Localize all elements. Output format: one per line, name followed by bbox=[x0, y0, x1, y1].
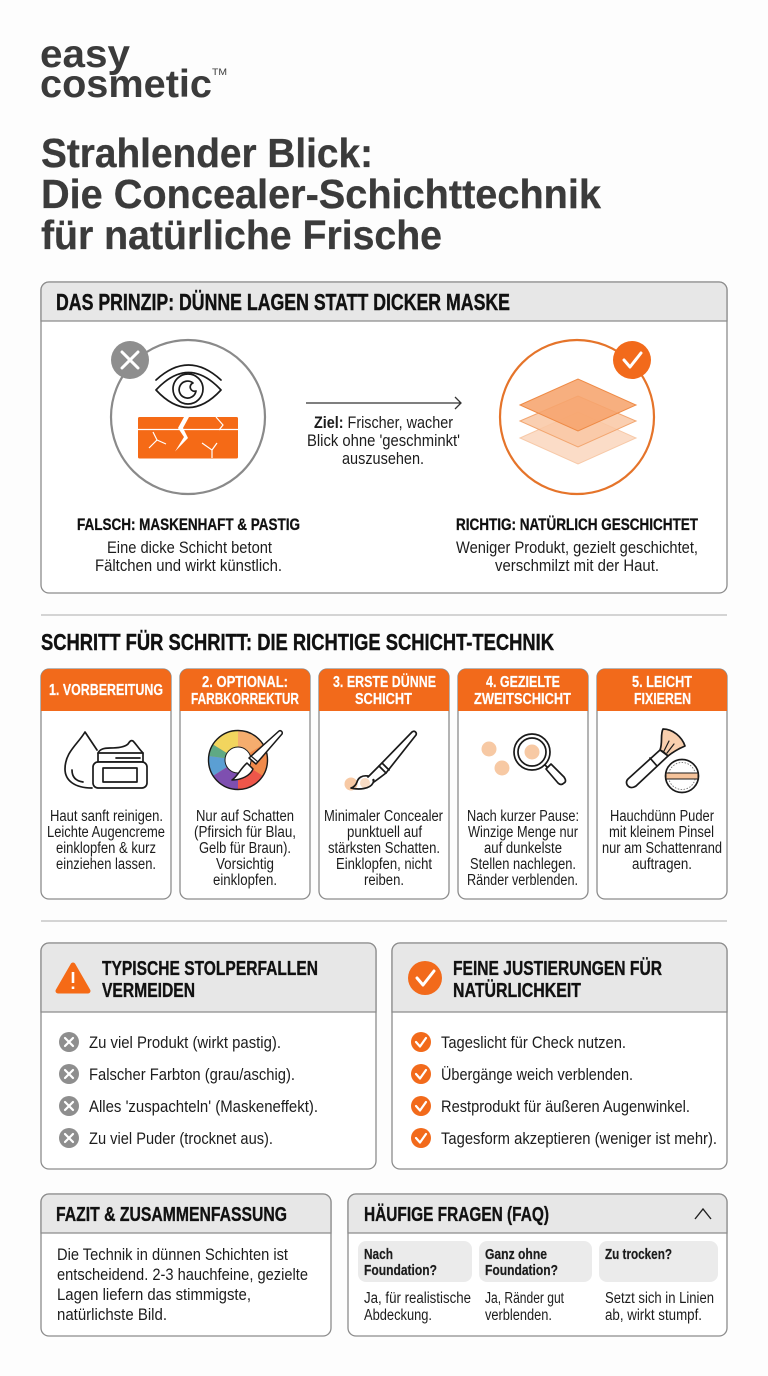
step card 1: 1. VORBEREITUNG bbox=[49, 682, 163, 699]
logo: cosmetic bbox=[40, 63, 212, 106]
text: step 4: Stellen nachlegen. bbox=[470, 856, 576, 873]
list: adjustments: Tageslicht für Check nutzen. bbox=[441, 1033, 626, 1052]
step card 4: 4. GEZIELTE bbox=[486, 674, 560, 691]
faq item 3: ab, wirkt stumpf. bbox=[605, 1307, 702, 1324]
text: step 5: nur am Schattenrand bbox=[602, 840, 722, 857]
step card 2: FARBKORREKTUR bbox=[191, 691, 299, 708]
text: step 3: Minimaler Concealer bbox=[324, 808, 443, 825]
title bbox=[41, 130, 601, 258]
text: falsch bbox=[77, 516, 300, 575]
faq item 2: verblenden. bbox=[485, 1307, 552, 1324]
icon: wrong, thick cracked layer bbox=[111, 340, 265, 494]
text: step 4: Ränder verblenden. bbox=[467, 872, 578, 889]
text: step 5: Hauchdünn Puder bbox=[610, 808, 714, 825]
text: step 2: Vorsichtig bbox=[216, 856, 274, 873]
text: step 2: einklopfen. bbox=[213, 872, 277, 889]
faq item 1: Ja, für realistische bbox=[364, 1290, 471, 1307]
list: pitfalls: Zu viel Puder (trocknet aus). bbox=[89, 1129, 273, 1148]
text: richtig: verschmilzt mit der Haut. bbox=[495, 556, 659, 575]
text: step 1 bbox=[47, 808, 165, 873]
step card 3: 3. ERSTE DÜNNE bbox=[333, 672, 436, 691]
heading: stolperfallen bbox=[102, 957, 318, 1002]
heading: faq: HÄUFIGE FRAGEN (FAQ) bbox=[364, 1203, 549, 1226]
icon: colour wheel and brush bbox=[208, 730, 282, 790]
panel: das prinzip bbox=[41, 282, 727, 593]
text: richtig: RICHTIG: NATÜRLICH GESCHICHTET bbox=[456, 515, 698, 534]
faq item 3: Zu trocken? bbox=[605, 1247, 672, 1263]
faq item 1: Foundation? bbox=[364, 1263, 437, 1279]
faq item 2: Foundation? bbox=[485, 1263, 558, 1279]
text: richtig bbox=[456, 515, 698, 575]
text: step 2 bbox=[194, 808, 296, 889]
heading: schritt fuer schritt: SCHRITT FÜR SCHRITT: DIE RICHTIGE SCHICHT-TECHNIK bbox=[41, 629, 554, 655]
text: step 5: mit kleinem Pinsel bbox=[609, 824, 714, 841]
list: pitfalls: Falscher Farbton (grau/aschig). bbox=[89, 1065, 295, 1084]
icon: magnifier and dots bbox=[482, 734, 566, 784]
text: step 3: stärksten Schatten. bbox=[328, 840, 440, 857]
step card 1 bbox=[41, 669, 171, 899]
text: step 3 bbox=[324, 808, 443, 889]
text: step 4: Nach kurzer Pause: bbox=[467, 808, 579, 825]
list: pitfalls: Zu viel Produkt (wirkt pastig). bbox=[89, 1033, 281, 1052]
text: step 4 bbox=[467, 808, 579, 889]
icon: right, thin layers bbox=[500, 340, 654, 494]
icon: powder brush and puff bbox=[626, 729, 698, 792]
faq item 1: Abdeckung. bbox=[364, 1307, 432, 1324]
text: step 5: auftragen. bbox=[632, 856, 692, 873]
text: step 4: Winzige Menge nur bbox=[468, 824, 578, 841]
text: falsch: Eine dicke Schicht betont bbox=[107, 538, 272, 557]
step card 5 bbox=[597, 669, 727, 899]
text: falsch: FALSCH: MASKENHAFT & PASTIG bbox=[77, 516, 300, 534]
faq item 1: Nach bbox=[364, 1247, 393, 1263]
arrow and goal bbox=[306, 397, 461, 468]
step card 3 bbox=[319, 669, 449, 899]
list: pitfalls: Alles 'zuspachteln' (Maskeneffekt). bbox=[89, 1097, 318, 1116]
title: für natürliche Frische bbox=[41, 212, 442, 258]
list: adjustments: Übergänge weich verblenden. bbox=[441, 1065, 633, 1084]
text: step 5 bbox=[602, 808, 722, 873]
text: fazit body: natürlichste Bild. bbox=[57, 1306, 167, 1324]
text: fazit body: Lagen liefern das stimmigste, bbox=[57, 1286, 251, 1304]
arrow and goal: auszusehen. bbox=[342, 449, 424, 468]
step card 5: 5. LEICHT bbox=[632, 674, 692, 691]
list: adjustments: Restprodukt für äußeren Augenwinkel. bbox=[441, 1097, 690, 1116]
faq item 3: Setzt sich in Linien bbox=[605, 1290, 714, 1307]
icon: check bbox=[408, 961, 442, 995]
text: fazit body: entscheidend. 2-3 hauchfeine, gezielte bbox=[57, 1266, 308, 1284]
text: step 2: Nur auf Schatten bbox=[196, 808, 294, 825]
step card 3: SCHICHT bbox=[355, 691, 412, 708]
text: step 3: Einklopfen, nicht bbox=[336, 856, 433, 873]
heading: stolperfallen: TYPISCHE STOLPERFALLEN bbox=[102, 957, 318, 980]
faq item 2: Ganz ohne bbox=[485, 1247, 547, 1263]
arrow and goal: Blick ohne 'geschminkt' bbox=[307, 431, 460, 450]
text: step 3: punktuell auf bbox=[347, 824, 423, 841]
text: step 1: Leichte Augencreme bbox=[47, 824, 165, 841]
heading: justierungen: FEINE JUSTIERUNGEN FÜR bbox=[453, 957, 662, 980]
arrow and goal: Ziel: Frischer, wacher bbox=[314, 413, 453, 432]
text: fazit body bbox=[57, 1246, 308, 1324]
faq item 3 bbox=[599, 1241, 718, 1324]
text: step 2: Gelb für Braun). bbox=[199, 840, 291, 857]
text: step 1: Haut sanft reinigen. bbox=[50, 808, 163, 825]
text: step 4: auf dunkelste bbox=[484, 840, 562, 857]
logo: TM bbox=[212, 67, 227, 77]
panel: justierungen bbox=[392, 943, 727, 1169]
step card 4: ZWEITSCHICHT bbox=[474, 691, 571, 708]
heading: stolperfallen: VERMEIDEN bbox=[102, 979, 195, 1002]
step card 2: 2. OPTIONAL: bbox=[202, 674, 288, 691]
faq item 2: Ja, Ränder gut bbox=[485, 1290, 565, 1307]
faq item 1 bbox=[358, 1241, 472, 1324]
text: falsch: Fältchen und wirkt künstlich. bbox=[95, 556, 282, 575]
panel: faq bbox=[348, 1194, 727, 1336]
text: step 3: reiben. bbox=[364, 872, 404, 889]
heading: justierungen: NATÜRLICHKEIT bbox=[453, 979, 581, 1002]
panel: fazit bbox=[41, 1194, 331, 1336]
list: adjustments: Tagesform akzeptieren (weniger ist mehr). bbox=[441, 1129, 717, 1148]
icon: concealer brush bbox=[344, 731, 416, 790]
list: pitfalls bbox=[59, 1032, 318, 1148]
icon: chevron bbox=[695, 1209, 711, 1219]
faq item 2 bbox=[479, 1241, 592, 1324]
icon: drop and cream jar bbox=[65, 732, 147, 788]
step card 5: FIXIEREN bbox=[634, 691, 691, 708]
text: step 2: (Pfirsich für Blau, bbox=[194, 824, 296, 841]
heading: das prinzip: DAS PRINZIP: DÜNNE LAGEN STATT DICKER MASKE bbox=[56, 289, 510, 315]
title: Die Concealer-Schichttechnik bbox=[41, 171, 601, 217]
step card 2 bbox=[180, 669, 310, 899]
logo bbox=[40, 33, 227, 106]
heading: justierungen bbox=[453, 957, 662, 1002]
text: fazit body: Die Technik in dünnen Schichten ist bbox=[57, 1246, 288, 1264]
heading: fazit: FAZIT & ZUSAMMENFASSUNG bbox=[56, 1203, 287, 1226]
title: Strahlender Blick: bbox=[41, 130, 373, 176]
panel: stolperfallen bbox=[41, 943, 376, 1169]
list: adjustments bbox=[411, 1032, 717, 1148]
text: step 1: einklopfen & kurz bbox=[56, 840, 156, 857]
text: richtig: Weniger Produkt, gezielt geschichtet, bbox=[456, 538, 698, 557]
icon: warning bbox=[58, 965, 88, 991]
step card 4 bbox=[458, 669, 588, 899]
logo: easy bbox=[40, 33, 130, 76]
text: step 1: einziehen lassen. bbox=[56, 856, 156, 873]
